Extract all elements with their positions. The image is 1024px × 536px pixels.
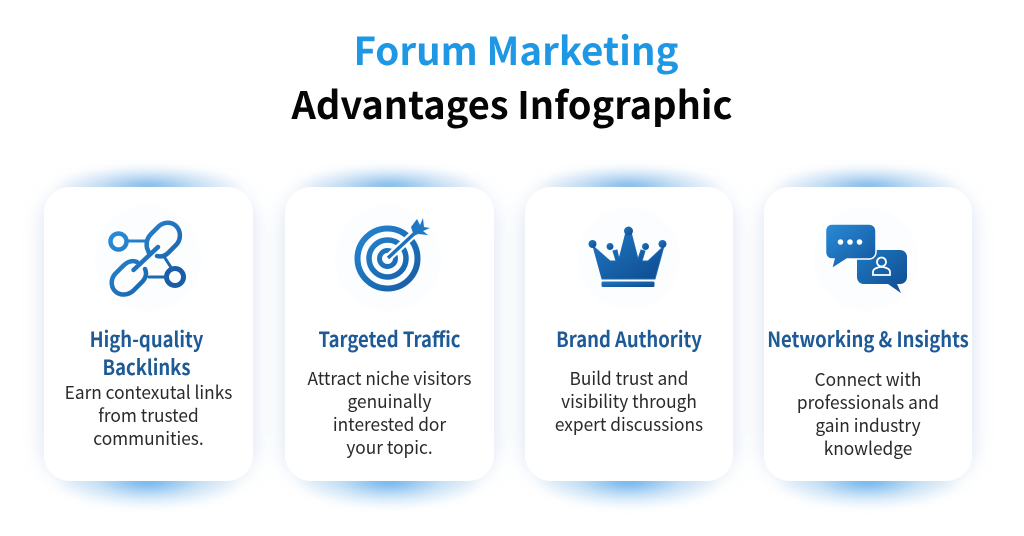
heading: High-quality Backlinks: Backlinks — [102, 352, 190, 382]
text: networking description: gain industry — [815, 412, 921, 438]
panel: Brand Authority — [525, 187, 733, 481]
text: backlinks description: from trusted — [98, 402, 198, 428]
panel: Targeted Traffic — [285, 187, 494, 481]
text: traffic description — [308, 365, 471, 460]
text: traffic description: genuinally — [348, 388, 431, 414]
text: authority description: Build trust and — [570, 365, 688, 391]
text: networking description — [797, 366, 939, 461]
panel: High-quality Backlinks — [44, 187, 253, 481]
text: traffic description: your topic. — [346, 434, 433, 460]
icon: chain link — [95, 205, 201, 311]
title: Advantages Infographic: Advantages Infographic — [292, 75, 732, 130]
text: backlinks description — [64, 379, 232, 451]
title: Forum Marketing: Forum Marketing — [353, 21, 679, 77]
heading: Brand Authority: Brand Authority — [556, 324, 702, 354]
text: networking description: professionals and — [797, 389, 939, 415]
text: traffic description: Attract niche visitors — [308, 365, 471, 391]
panel: Networking & Insights — [764, 187, 972, 481]
text: backlinks description: communities. — [93, 425, 203, 451]
text: authority description — [555, 365, 703, 437]
icon: chat bubbles — [814, 207, 918, 311]
text: traffic description: interested dor — [333, 411, 446, 437]
icon: target with arrow — [335, 205, 441, 311]
text: networking description: Connect with — [815, 366, 921, 392]
heading: High-quality Backlinks — [90, 324, 204, 382]
icon: crown — [578, 207, 680, 309]
text: authority description: expert discussions — [555, 411, 703, 437]
text: authority description: visibility through — [561, 388, 697, 414]
text: networking description: knowledge — [824, 435, 912, 461]
heading: High-quality Backlinks: High-quality — [90, 324, 203, 354]
heading: Targeted Traffic: Targeted Traffic — [318, 324, 461, 354]
text: backlinks description: Earn contexutal links — [64, 379, 232, 405]
heading: Networking & Insights: Networking & Insights — [767, 324, 969, 354]
